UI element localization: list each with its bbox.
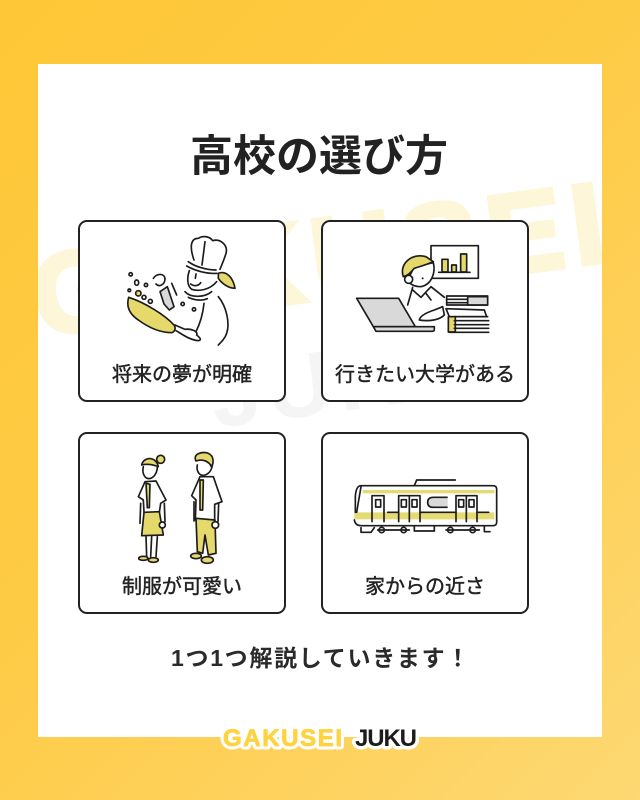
illustration: chef <box>126 236 236 346</box>
illustration: students in uniform <box>138 452 223 564</box>
label: 行きたい大学がある <box>335 364 515 386</box>
brand logo <box>220 725 419 752</box>
card: cute uniform <box>78 432 286 614</box>
label: 将来の夢が明確 <box>112 364 252 386</box>
illustration: student with laptop <box>356 244 490 334</box>
label: 制服が可愛い <box>122 576 242 598</box>
card: future dream <box>78 220 286 402</box>
footer message: 1つ1つ解説していきます！ <box>171 645 471 671</box>
watermark logo: JUKU <box>205 314 484 448</box>
title: 高校の選び方 <box>190 133 448 181</box>
brand logo: GAKUSEI <box>223 725 342 752</box>
label: 家からの近さ <box>365 576 485 598</box>
white panel <box>38 64 602 737</box>
card: close to home <box>321 432 529 614</box>
brand logo: GAKUSEI <box>223 725 342 752</box>
illustration: train <box>354 479 498 534</box>
card: target university <box>321 220 529 402</box>
brand logo: JUKU <box>355 725 417 752</box>
brand logo: JUKU <box>355 725 417 752</box>
